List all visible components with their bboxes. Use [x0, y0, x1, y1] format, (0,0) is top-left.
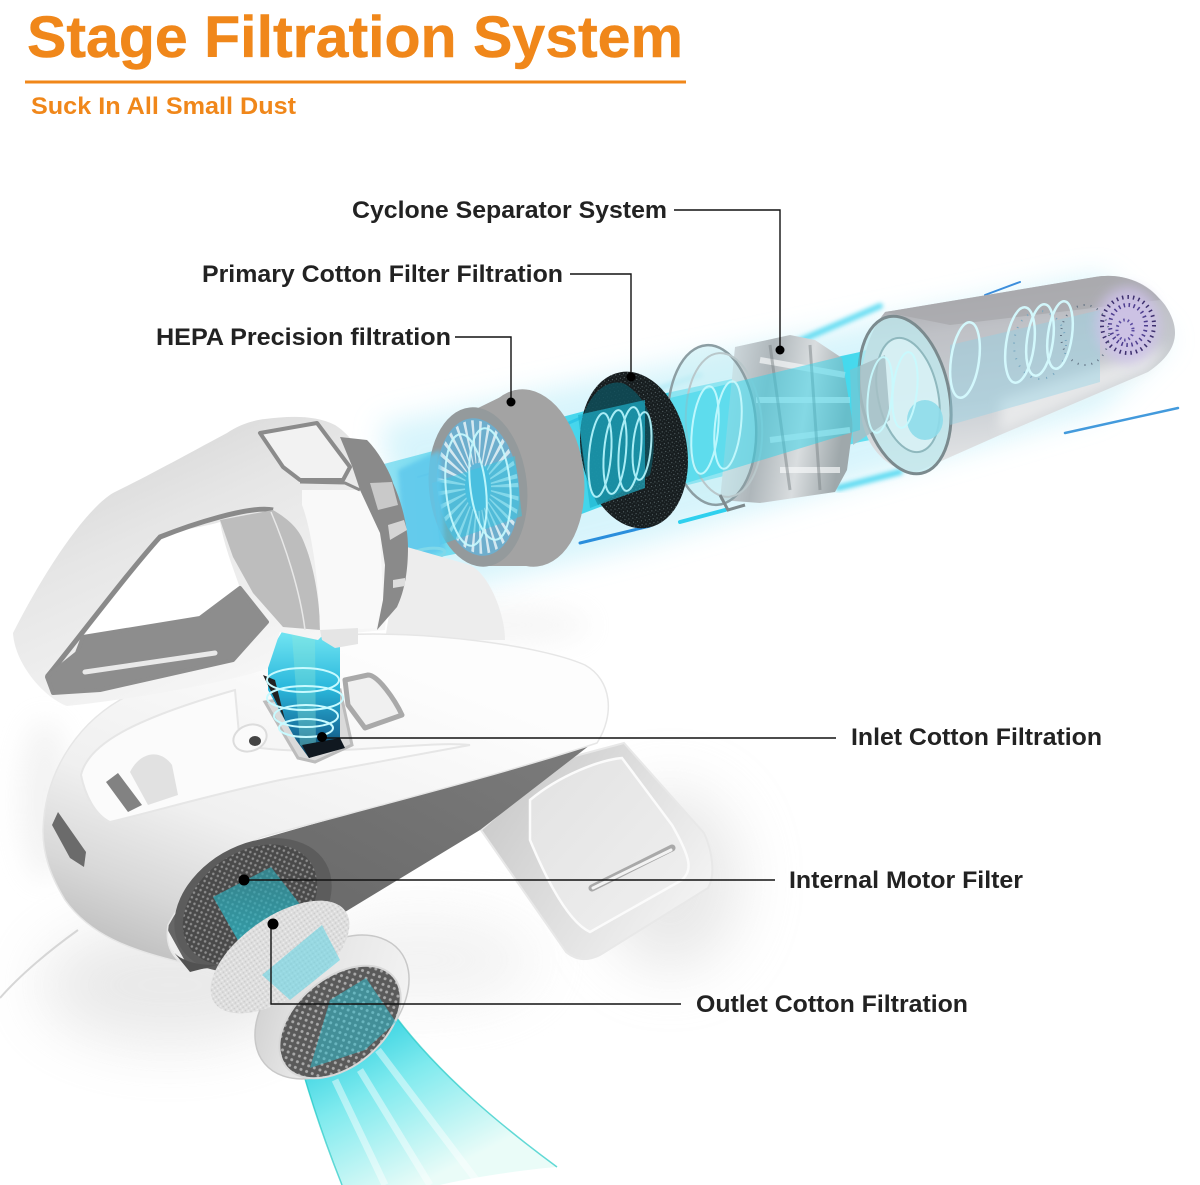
- cyclone separator: [663, 335, 921, 510]
- filter face: [421, 402, 535, 572]
- control button: [260, 423, 350, 480]
- title underline: [25, 80, 686, 84]
- vertical inlet airflow: [263, 630, 345, 758]
- callout: primary cotton filter: Primary Cotton Filter Filtration: [202, 261, 563, 288]
- callout: outlet cotton: [268, 918, 968, 1018]
- primary cotton filter sponge: [568, 363, 700, 537]
- handle hole rim: [47, 509, 273, 677]
- cyan airflow beam: [380, 330, 1000, 565]
- side vent: [52, 812, 86, 867]
- cup coil: [946, 300, 1077, 400]
- grip recess plate: [220, 510, 320, 630]
- slider tabs: [106, 754, 178, 812]
- blue speed streaks: [418, 282, 1178, 543]
- screw mount: [230, 720, 270, 756]
- inlet well: [265, 690, 352, 762]
- dark underside wedge: [165, 745, 590, 970]
- callout: outlet cotton: Outlet Cotton Filtration: [696, 991, 968, 1018]
- callout: cyclone separator: Cyclone Separator System: [352, 197, 667, 224]
- dust cup opening: [845, 308, 965, 482]
- outlet cotton filter disc: [192, 878, 368, 1036]
- HEPA precision filter: [421, 384, 593, 572]
- callout: cyclone separator: [352, 197, 784, 354]
- white plate behind handle: [385, 545, 505, 640]
- internal cup flow: [950, 310, 1100, 425]
- exhaust airflow: [302, 1017, 557, 1185]
- callout: internal motor: Internal Motor Filter: [789, 867, 1023, 894]
- subtitle: Suck In All Small Dust: [31, 93, 296, 120]
- dust cup: [845, 276, 1175, 482]
- grip bar: [47, 588, 267, 693]
- neck: [320, 628, 358, 648]
- body highlight: [302, 490, 383, 632]
- top recess highlight: [81, 690, 470, 822]
- handle and filter housing: [13, 417, 408, 706]
- tube halo: [380, 275, 1170, 600]
- exhaust highlights: [335, 1050, 480, 1185]
- main white shell: [43, 634, 608, 962]
- rim band: [463, 384, 593, 572]
- power cord: [0, 930, 78, 998]
- pleated fins: [447, 440, 509, 534]
- callout: inlet cotton: [317, 724, 1102, 751]
- callout: HEPA: HEPA Precision filtration: [156, 324, 451, 351]
- title: Stage Filtration System: [27, 5, 683, 70]
- callout: primary cotton filter: [202, 261, 636, 382]
- vacuum base body: [43, 545, 712, 999]
- callout: internal motor: [238, 867, 1023, 894]
- motor filter cavity: [150, 811, 356, 999]
- handle shell: [13, 417, 393, 706]
- callout: inlet cotton: Inlet Cotton Filtration: [851, 724, 1102, 751]
- battery pack: [481, 743, 712, 959]
- intake airflow between ring and filter: [398, 450, 446, 565]
- outlet ring cover: [227, 906, 437, 1108]
- dust cloud: [1014, 287, 1160, 379]
- square latch: [345, 675, 402, 728]
- soft floor shadows: [20, 605, 740, 1045]
- exhaust edge lines: [303, 1017, 557, 1185]
- callouts and labels: [156, 197, 1102, 1018]
- diagram: filter tube exploded view: [380, 275, 1178, 600]
- metal ring: [340, 437, 408, 630]
- callout: HEPA: [156, 324, 516, 406]
